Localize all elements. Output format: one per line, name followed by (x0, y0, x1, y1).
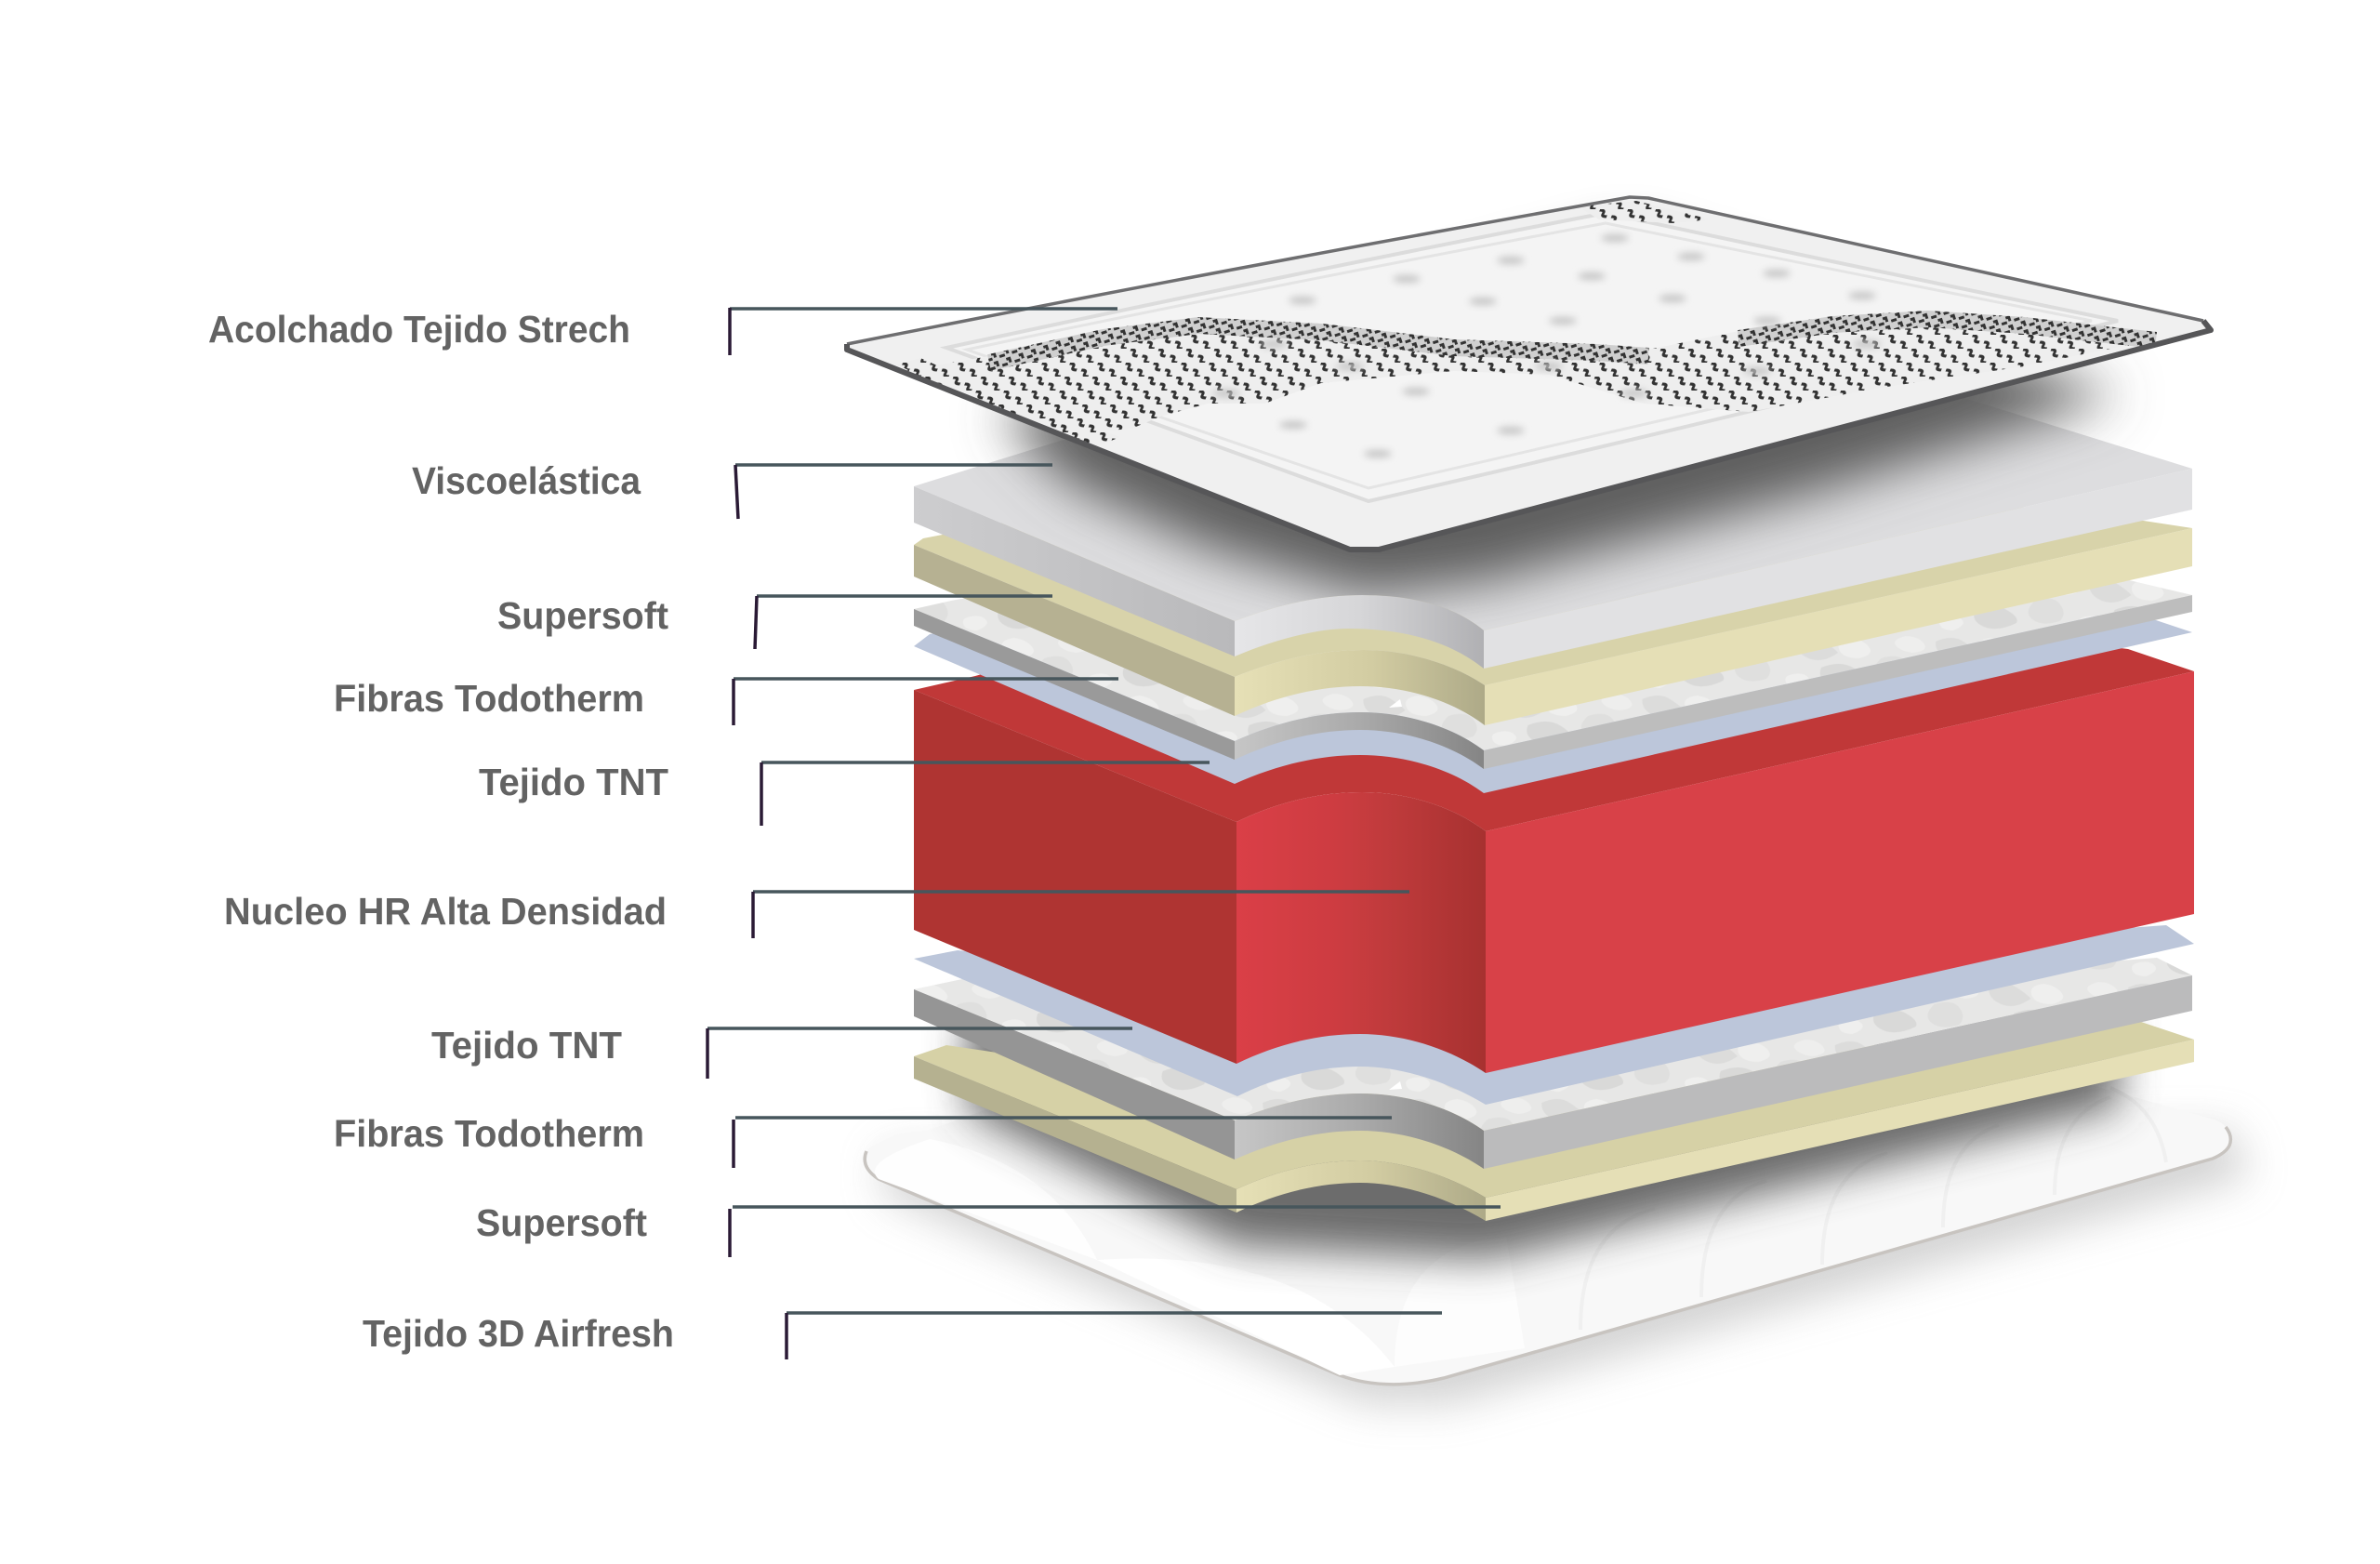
white fleck (1389, 699, 1402, 708)
leader line: Viscoelástica (735, 465, 1052, 519)
layer: upper Supersoft (914, 446, 2192, 725)
label: Tejido 3D Airfresh: Tejido 3D Airfresh (363, 1312, 674, 1355)
label: Acolchado Tejido Strech: Acolchado Tejido Strech (208, 308, 630, 351)
cover rim, thin upper edges (847, 197, 2203, 344)
label: Fibras Todotherm lower: Fibras Todotherm (334, 1112, 644, 1155)
layer: lower Tejido TNT (914, 925, 2194, 1105)
cover pattern at top corner (1590, 201, 1701, 223)
top layer: Acolchado quilted cover (847, 197, 2211, 550)
leader line: Nucleo HR Alta Densidad (753, 892, 1409, 938)
layer: lower Supersoft (914, 1021, 2194, 1221)
cover inner panel (946, 213, 2118, 501)
shadow under quilted cover (978, 359, 2131, 620)
leader line: Supersoft lower (730, 1207, 1501, 1257)
label: Viscoelástica: Viscoelástica (412, 459, 641, 502)
leader line: Tejido TNT lower (707, 1028, 1132, 1079)
layer: Viscoelástica (914, 279, 2192, 669)
label: Supersoft upper: Supersoft (497, 594, 668, 637)
fabric scallops (1097, 1258, 1395, 1375)
layer: Nucleo HR red core (914, 558, 2194, 1073)
leader line: Tejido 3D Airfresh (787, 1313, 1442, 1359)
leader line: Fibras Todotherm upper (734, 679, 1118, 725)
white fleck (1389, 1081, 1402, 1090)
label: Supersoft lower: Supersoft (476, 1201, 647, 1244)
leader line: Tejido TNT upper (761, 762, 1210, 826)
fabric bottom edge (865, 1127, 2230, 1385)
label: Nucleo HR Alta Densidad: Nucleo HR Alta Densidad (224, 890, 667, 933)
cover patterned band (906, 327, 2126, 430)
cover dense band edge (989, 319, 2156, 363)
shadow of stack on fabric (967, 1014, 2120, 1260)
cover tufts (1212, 234, 1881, 457)
label: Tejido TNT upper: Tejido TNT (479, 761, 668, 803)
label: Tejido TNT lower: Tejido TNT (431, 1024, 622, 1067)
label: Fibras Todotherm upper: Fibras Todotherm (334, 677, 644, 720)
layer: lower Fibras Todotherm (914, 958, 2192, 1169)
cover pattern at left edge (897, 358, 1120, 446)
leader line: Supersoft upper (755, 596, 1052, 649)
leader line: Acolchado Tejido Strech (730, 308, 1117, 355)
layer: upper Tejido TNT (914, 558, 2192, 793)
leader line: Fibras Todotherm lower (734, 1118, 1392, 1168)
cover rim, thick lower edges (847, 321, 2211, 550)
layer: upper Fibras Todotherm (914, 521, 2192, 769)
bottom layer: Tejido 3D Airfresh fabric (865, 930, 2250, 1404)
